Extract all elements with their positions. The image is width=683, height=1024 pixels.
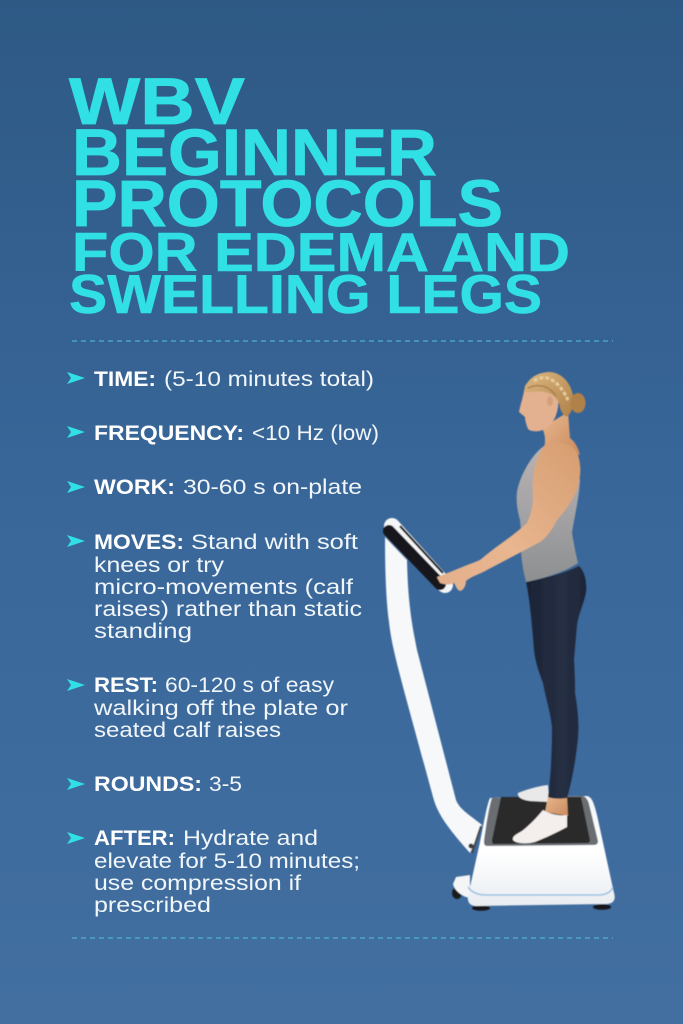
list item: work: 30-60 s on-plate: [183, 476, 362, 499]
machine: vibration platform: [468, 796, 615, 911]
list item: after: [67, 827, 360, 917]
person: arm and hand: [437, 443, 580, 591]
title: WBV: [69, 64, 245, 138]
list item: after: use compression if: [94, 872, 301, 895]
person: grey tank top: [517, 436, 580, 582]
list item: moves: micro-movements (calf: [94, 576, 353, 599]
title: SWELLING LEGS: [69, 263, 542, 325]
list item: after: prescribed: [94, 894, 211, 917]
list item: moves: Stand with soft: [191, 531, 358, 554]
list item: rest: walking off the plate or: [93, 697, 348, 720]
list item: rest: 60-120 s of easy: [165, 674, 335, 697]
title: [69, 64, 570, 325]
list item: work: [67, 476, 362, 499]
protocol list: [67, 368, 379, 917]
list item: moves: knees or try: [94, 554, 225, 577]
list item: rounds: 3-5: [209, 773, 242, 796]
list item: moves: [67, 531, 362, 643]
machine: handle console: [389, 526, 445, 585]
list item: rounds: ROUNDS:: [94, 773, 202, 796]
list item: rest: REST:: [94, 674, 158, 697]
machine: rear wheel: [452, 875, 470, 899]
title: FOR EDEMA AND: [72, 221, 570, 283]
list item: rounds: [67, 773, 242, 796]
list item: after: elevate for 5-10 minutes;: [94, 850, 360, 873]
list item: moves: standing: [94, 620, 192, 643]
list item: rest: seated calf raises: [94, 719, 281, 742]
person: legs and feet: [513, 566, 586, 843]
list item: rest: [67, 674, 348, 742]
list item: moves: MOVES:: [94, 531, 184, 554]
list item: time: [67, 368, 374, 391]
list item: after: Hydrate and: [183, 827, 318, 850]
list item: frequency: FREQUENCY:: [94, 422, 244, 445]
list item: work: WORK:: [94, 476, 175, 499]
machine: upright pole: [385, 537, 482, 853]
list item: frequency: <10 Hz (low): [252, 422, 379, 445]
title: BEGINNER: [72, 115, 437, 189]
list item: after: AFTER:: [94, 827, 175, 850]
list item: time: TIME:: [94, 368, 156, 391]
title: PROTOCOLS: [72, 166, 503, 240]
list item: frequency: [67, 422, 379, 445]
list item: time: (5-10 minutes total): [164, 368, 374, 391]
list item: moves: raises) rather than static: [94, 598, 362, 621]
person: head and neck: [519, 372, 586, 455]
illustration: woman standing on vibration plate: [385, 372, 615, 911]
